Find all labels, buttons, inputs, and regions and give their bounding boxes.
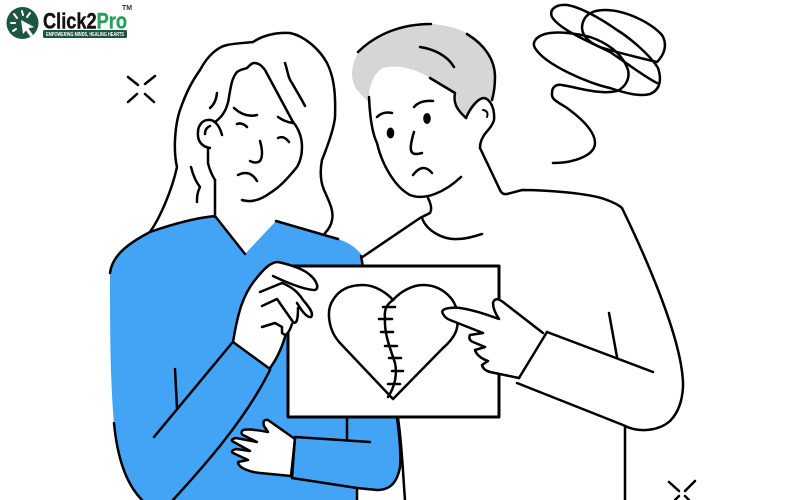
heart: [329, 285, 458, 399]
woman lower hand and sleeve: [232, 420, 400, 490]
sparkle: left: [128, 76, 155, 102]
woman blue shirt: [110, 180, 405, 500]
card with stitched heart: [288, 266, 499, 417]
man pointing hand and sleeve: [442, 299, 547, 378]
woman hair: [150, 33, 335, 233]
trademark: TM: [122, 5, 132, 12]
man face: [369, 97, 494, 197]
scribble: [534, 5, 665, 163]
stitches: [385, 300, 396, 397]
logo tagline: EMPOWERING MINDS, HEALING HEARTS: [46, 32, 125, 38]
logo wordmark: Click2Pro: [43, 8, 127, 34]
icon: logo cursor badge: [6, 7, 38, 39]
man hair: [352, 24, 495, 118]
man body: [361, 148, 683, 500]
woman face: [198, 108, 293, 181]
logo: Click2Pro: [6, 5, 132, 39]
woman upper hand: [233, 262, 317, 369]
sparkle: bottom right: [669, 481, 695, 500]
